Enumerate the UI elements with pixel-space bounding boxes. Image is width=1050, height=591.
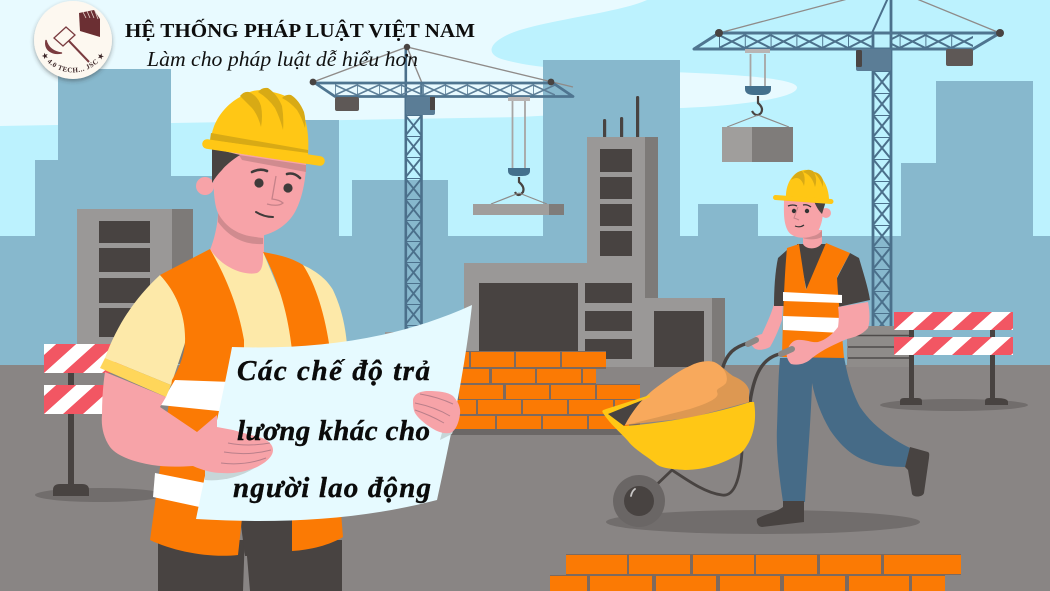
shirt left sleeve xyxy=(105,275,186,385)
neck xyxy=(803,230,822,248)
crane cab xyxy=(856,49,891,71)
wheelbarrow handles xyxy=(722,343,780,402)
crane: left xyxy=(310,44,573,330)
crane mast xyxy=(405,47,422,330)
back shoe xyxy=(905,447,929,497)
paper sign text: Các chế độ trả xyxy=(237,355,430,387)
main worker: head xyxy=(196,88,320,276)
building windows xyxy=(99,221,150,337)
ground xyxy=(0,365,1050,591)
paper sign text xyxy=(233,355,431,504)
barrier boards xyxy=(44,344,124,414)
crane pivot dots xyxy=(310,44,554,85)
ear xyxy=(821,208,831,218)
sleeve cuff xyxy=(100,358,171,397)
barrier: left xyxy=(35,344,165,502)
shirt centre xyxy=(210,249,300,360)
barrier shadow xyxy=(35,488,165,502)
paper sign text: lương khác cho xyxy=(237,415,430,447)
vest reflective stripes xyxy=(783,292,842,333)
crane mast xyxy=(873,0,891,327)
main worker: lower body xyxy=(158,510,342,591)
crane base: right xyxy=(847,326,913,367)
crane cables xyxy=(719,0,1000,33)
hat brim xyxy=(207,144,320,161)
wheelbarrow interior xyxy=(606,397,650,426)
crane hoist ropes xyxy=(508,97,530,168)
trousers xyxy=(158,533,342,591)
base block xyxy=(464,263,645,367)
building windows xyxy=(479,149,704,367)
left hand fingers xyxy=(221,443,271,464)
face xyxy=(213,150,306,237)
antennas xyxy=(603,96,639,138)
crane load: slab xyxy=(473,204,564,215)
ground shadow xyxy=(606,510,920,534)
icon: books xyxy=(79,10,100,37)
face xyxy=(784,200,823,238)
wheelbarrow wheel xyxy=(613,475,665,527)
crane jib xyxy=(315,83,573,96)
main worker: torso xyxy=(100,249,347,556)
sand load xyxy=(625,361,749,425)
crane load: concrete block xyxy=(722,127,793,162)
facial features xyxy=(788,205,811,227)
crane: right xyxy=(694,0,1004,327)
facial features xyxy=(252,170,300,217)
safety vest xyxy=(150,249,343,556)
building: left xyxy=(77,209,193,364)
crane hook xyxy=(727,86,789,127)
handle grips xyxy=(748,340,792,354)
wheelbarrow frame xyxy=(650,452,742,495)
wheelbarrow tray xyxy=(602,395,755,470)
crane cables xyxy=(313,47,573,87)
hand shadow left xyxy=(205,452,268,480)
neck shadow xyxy=(218,213,263,244)
hair xyxy=(212,148,240,183)
safety vest xyxy=(782,243,850,358)
crane hook xyxy=(491,168,547,204)
crane counterweight xyxy=(946,49,973,66)
hard hat xyxy=(776,170,831,202)
left arm xyxy=(750,304,783,350)
right hand fingers xyxy=(415,394,453,423)
back leg and trousers xyxy=(777,357,910,502)
worker with wheelbarrow xyxy=(602,170,929,534)
logo badge xyxy=(31,0,115,84)
hair xyxy=(814,201,826,214)
tower xyxy=(587,137,645,297)
crane jib xyxy=(694,33,1000,49)
shirt right sleeve xyxy=(303,265,347,350)
hard hat xyxy=(207,88,320,161)
heading: tagline: Làm cho pháp luật dễ hiểu hơn xyxy=(146,47,418,71)
paper sheet xyxy=(196,305,472,521)
annex block xyxy=(645,298,725,367)
paper sign text: người lao động xyxy=(233,472,431,504)
hand shadow right xyxy=(440,416,458,440)
small gray footing by crane xyxy=(385,332,425,372)
barrier shadow xyxy=(880,399,1028,411)
hat ridges xyxy=(240,88,305,130)
arm and left hand xyxy=(102,372,273,473)
building: centre xyxy=(464,96,725,367)
city skyline silhouette xyxy=(0,60,1050,370)
neck xyxy=(210,213,264,276)
right hand xyxy=(413,391,460,433)
brick wall: foreground xyxy=(550,554,961,591)
barrier boards xyxy=(894,312,1013,355)
vest right panel lower xyxy=(292,500,343,551)
hat band xyxy=(210,133,308,153)
ear xyxy=(196,177,214,195)
front shoe xyxy=(757,501,804,527)
hairline shadow xyxy=(239,155,306,172)
brick wall: centre xyxy=(440,351,640,435)
right arm xyxy=(787,302,870,365)
icon: gavel xyxy=(46,27,89,62)
crane cab xyxy=(406,97,435,115)
t-shirt sleeves and collar xyxy=(774,244,870,307)
vest reflective stripes xyxy=(153,380,232,508)
barrier: right xyxy=(880,312,1028,411)
crane counterweight xyxy=(335,97,359,111)
main worker: arms and hands xyxy=(102,372,460,480)
background: pale cloud xyxy=(0,0,797,126)
heading: organisation name: HỆ THỐNG PHÁP LUẬT VIỆT NAM xyxy=(125,18,475,42)
logo curved text: ★ 4.0 TECH... JSC ★ xyxy=(42,52,104,72)
logo circle xyxy=(34,1,112,79)
vest right panel upper xyxy=(263,252,330,350)
crane strut xyxy=(872,0,888,33)
vest left panel xyxy=(150,249,244,556)
barrier post xyxy=(53,373,89,496)
crane hoist ropes xyxy=(745,49,770,87)
barrier posts xyxy=(900,330,1008,405)
crane pivot dots xyxy=(715,29,1004,37)
